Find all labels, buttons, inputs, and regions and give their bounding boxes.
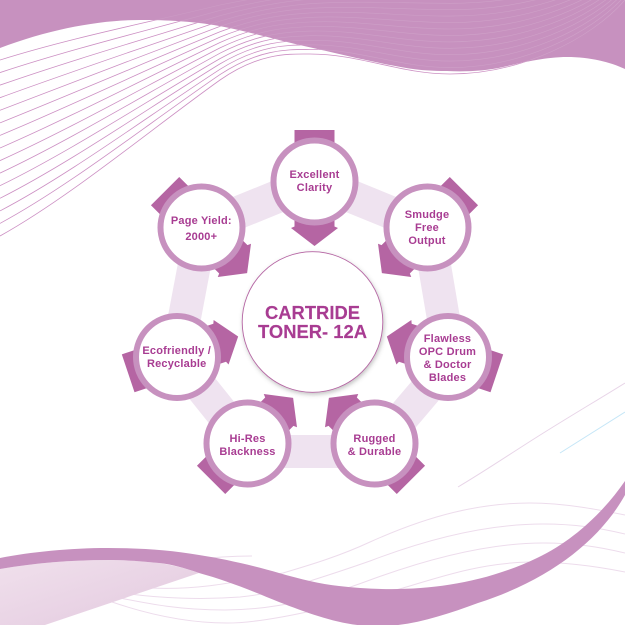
node: smudge free output: Free [415,222,439,234]
node: excellent clarity: Excellent [289,169,340,181]
node: flawless opc drum and doctor blades: Flawless [424,333,471,345]
node: page yield [160,186,242,268]
node: smudge free output [386,186,468,268]
right diagonal accent lines [458,383,625,487]
node: smudge free output: Smudge [405,209,449,221]
node: flawless opc drum and doctor blades [407,316,489,398]
node: flawless opc drum and doctor blades: OPC Drum [419,346,476,358]
arrow: hi-res blackness [194,381,310,497]
node: rugged and durable: & Durable [348,446,401,458]
center circle: cartridge toner: TONER- 12A [258,321,367,342]
arrow: smudge free output [365,174,481,290]
node: excellent clarity [274,140,356,222]
center circle: cartridge toner: CARTRIDE [265,302,360,323]
top-left thin wave lines [0,20,527,236]
node: flawless opc drum and doctor blades: & Doctor [423,359,472,371]
node: ecofriendly recyclable: Ecofriendly / [142,345,211,357]
center circle: cartridge toner [242,252,383,392]
node: hi-res blackness [206,402,288,484]
bottom faint curves [112,503,625,623]
node: ecofriendly recyclable: Recyclable [147,358,206,370]
node: smudge free output: Output [408,235,446,247]
node: hi-res blackness: Blackness [219,446,276,458]
connecting bands [177,182,450,452]
arrow: flawless opc drum [379,314,504,396]
node: flawless opc drum and doctor blades: Blades [429,372,466,384]
arrow: page yield [148,174,264,290]
node: ecofriendly recyclable [136,316,218,398]
node: page yield: Page Yield: [171,215,232,227]
bottom wave band [0,481,625,625]
diagram: toner cycle [121,130,504,497]
node: page yield: 2000+ [185,231,217,243]
arrow: excellent clarity [291,130,338,246]
arrow: ecofriendly [121,314,246,396]
node: rugged and durable [334,402,416,484]
arrow: rugged and durable [312,381,428,497]
node: excellent clarity: Clarity [297,182,333,194]
node: hi-res blackness: Hi-Res [229,433,266,445]
node: rugged and durable: Rugged [353,433,396,445]
top wave band [0,0,625,72]
bottom left gradient fill [0,560,199,625]
